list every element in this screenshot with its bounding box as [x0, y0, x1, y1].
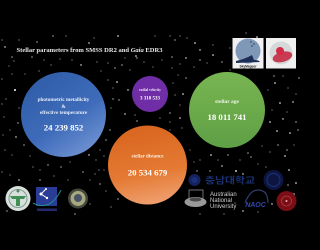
logo: dark blue seal — [264, 170, 284, 190]
logo: Australian National University: Australian — [210, 192, 237, 198]
circle: photometric metallicity and effective temperature: photometric metallicity — [38, 97, 90, 103]
logo: SkyMapper: SkyMapper — [239, 64, 257, 68]
title: Stellar parameters from SMSS DR2 and Gaia EDR3 — [16, 47, 163, 54]
logo: NAOC — [245, 190, 268, 209]
circle: radial velocity: radial velocity — [139, 88, 161, 92]
logo: blue square network — [33, 187, 61, 211]
circle: stellar distance: stellar distance — [132, 154, 164, 160]
circle: photometric metallicity and effective temperature: & — [61, 104, 66, 110]
circle: radial velocity: 3 310 533 — [140, 96, 160, 102]
circle: photometric metallicity and effective temperature — [21, 72, 106, 157]
logo: university crest green — [6, 186, 30, 211]
logo: Chungnam National University wordmark: 충남대학교 — [205, 174, 255, 186]
circle: photometric metallicity and effective temperature: effective temperature — [40, 110, 88, 116]
logo: red galaxy emblem — [266, 38, 296, 68]
logo: Australian National University — [184, 190, 237, 210]
logo: red seal — [276, 191, 296, 211]
logo: SkyMapper — [232, 38, 264, 68]
logo: Australian National University: National — [210, 198, 232, 204]
circle: stellar distance: 20 534 679 — [128, 168, 168, 178]
star field — [2, 32, 300, 215]
circle: stellar distance — [108, 126, 187, 204]
logo: Australian National University: University — [210, 204, 236, 210]
circle: stellar age — [189, 72, 265, 148]
logo: NAOC: NAOC — [245, 202, 267, 209]
logo: medal seal — [68, 188, 88, 208]
circle: photometric metallicity and effective temperature: 24 239 852 — [44, 122, 84, 132]
logo: Chungnam National University wordmark — [188, 174, 255, 186]
circle: radial velocity — [132, 76, 168, 112]
circle: stellar age: stellar age — [215, 99, 239, 105]
circle: stellar age: 18 011 741 — [207, 112, 247, 122]
